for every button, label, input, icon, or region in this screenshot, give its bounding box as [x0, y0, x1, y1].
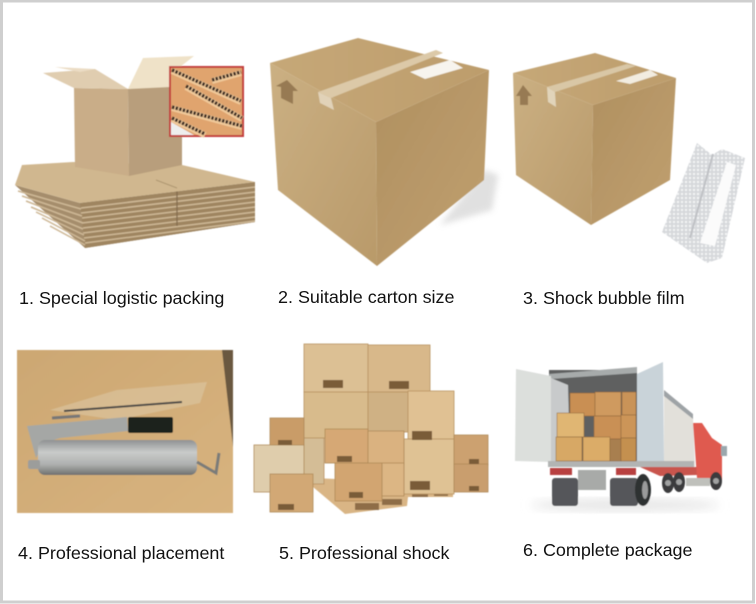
carton — [513, 53, 676, 225]
caption 5: 5. Professional shock — [279, 543, 450, 563]
right door — [637, 362, 664, 463]
left door — [515, 369, 551, 462]
tape — [318, 50, 443, 98]
grease gun — [27, 417, 219, 475]
back stacked boxes — [304, 344, 454, 494]
panel 2: suitable carton size image — [270, 38, 498, 266]
trailer — [515, 362, 697, 476]
bubble wrap roll — [662, 143, 745, 263]
panel 6: loaded truck image — [515, 362, 727, 512]
plastic bag and hose — [50, 382, 207, 420]
panel 4: professional placement photo — [17, 350, 233, 513]
ground shadow — [530, 498, 720, 512]
closed carton — [270, 38, 489, 266]
flat carton stack — [15, 162, 255, 248]
white label — [410, 60, 463, 79]
panel 3: shock bubble film image — [513, 53, 745, 263]
caption 4: 4. Professional placement — [18, 543, 224, 563]
arrow — [276, 80, 298, 104]
inset: corrugated cross-section — [170, 67, 243, 136]
panel 5: stacked boxes on pallets image — [254, 344, 488, 514]
red cab — [693, 423, 727, 480]
caption 3: 3. Shock bubble film — [523, 288, 685, 308]
panel 1: special logistic packing image — [15, 56, 255, 248]
open carton box — [43, 56, 194, 176]
caption 6: 6. Complete package — [523, 540, 693, 560]
handling marks — [278, 380, 479, 510]
box shadow — [440, 170, 498, 225]
cardboard background — [17, 350, 233, 513]
caption 1: 1. Special logistic packing — [19, 288, 224, 308]
wheels and chassis — [550, 468, 722, 506]
caption 2: 2. Suitable carton size — [278, 287, 455, 307]
cargo boxes — [556, 392, 636, 461]
front boxes — [254, 418, 488, 512]
pallet — [313, 478, 453, 514]
